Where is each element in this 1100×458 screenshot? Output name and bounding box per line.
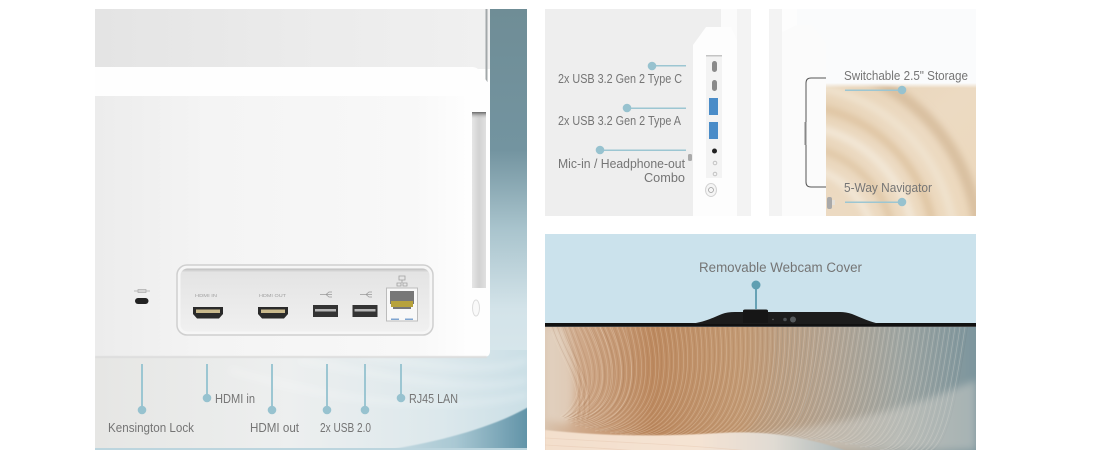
icon: Kensington symbol [134, 290, 150, 292]
icon: USB symbol 2 [360, 292, 372, 297]
side vent strip [472, 112, 486, 288]
callout: Kensington Lock: Kensington Lock [108, 421, 195, 435]
callout: USB-A [558, 104, 686, 128]
callout: storage [844, 69, 968, 94]
label: HDMI OUT: HDMI OUT [259, 293, 286, 299]
callout: audio combo [558, 146, 686, 185]
monitor stand edge [486, 9, 488, 85]
callout: RJ45 LAN [397, 364, 458, 406]
panel: storage and navigator [769, 9, 976, 216]
icon: power button [706, 184, 716, 196]
icon: audio jack [712, 148, 717, 154]
callout: HDMI in: HDMI in [215, 392, 255, 406]
callout: storage: Switchable 2.5" Storage [844, 69, 968, 83]
icon: USB port 1 [313, 305, 338, 317]
icon: network symbol [397, 276, 407, 286]
callout: 2x USB 2.0 [320, 364, 371, 435]
floor backdrop [95, 350, 532, 456]
icon: navigator joystick [827, 197, 835, 209]
port bay [177, 265, 433, 335]
icon: HDMI out port [258, 307, 288, 318]
monitor body [95, 67, 490, 358]
webcam cover [743, 310, 768, 323]
icon: RJ45 port [386, 288, 418, 321]
callout: navigator: 5-Way Navigator [844, 181, 932, 195]
callout: Kensington Lock [108, 364, 195, 435]
callout: USB-C: 2x USB 3.2 Gen 2 Type C [558, 72, 682, 86]
display wallpaper [545, 327, 976, 452]
callout: HDMI in [203, 364, 255, 406]
icon: power button [472, 300, 480, 316]
callout: USB-A: 2x USB 3.2 Gen 2 Type A [558, 114, 682, 128]
label: HDMI IN: HDMI IN [195, 293, 218, 299]
icon: USB port 2 [352, 305, 378, 317]
display bezel [545, 323, 976, 327]
callout: 2x USB 2.0: 2x USB 2.0 [320, 421, 371, 435]
callout: USB-C [558, 62, 686, 86]
icon: small indicators [713, 161, 717, 176]
backdrop right column [490, 9, 527, 350]
pale band above the sand [764, 380, 976, 450]
monitor edge [769, 9, 826, 216]
storage bay outline [806, 78, 826, 187]
wood texture [826, 84, 976, 216]
webcam housing [690, 312, 880, 324]
panel: webcam [545, 234, 976, 452]
callout: RJ45 LAN: RJ45 LAN [409, 392, 458, 406]
icon: USB symbol 1 [320, 292, 332, 297]
icon: HDMI in port [193, 307, 223, 318]
callout: webcam cover: Removable Webcam Cover [699, 260, 862, 275]
callout: HDMI out: HDMI out [250, 421, 299, 435]
sand dune foreground [545, 430, 850, 452]
background wall [95, 9, 491, 69]
callout: HDMI out [250, 364, 299, 435]
panel: side ports [545, 9, 751, 216]
storage latch [804, 122, 806, 145]
panel: rear ports [95, 9, 532, 456]
callout: navigator [844, 181, 932, 206]
callout: audio combo: Mic-in / Headphone-out [558, 157, 686, 171]
callout: audio combo: Combo [644, 171, 685, 185]
icon: Kensington slot [135, 298, 148, 304]
monitor side [693, 9, 751, 216]
icon: USB-C ports [712, 61, 717, 91]
icon: camera lenses [772, 316, 796, 322]
callout: webcam cover [699, 260, 862, 309]
icon: side nub [688, 154, 692, 161]
icon: USB-A ports [709, 98, 718, 139]
